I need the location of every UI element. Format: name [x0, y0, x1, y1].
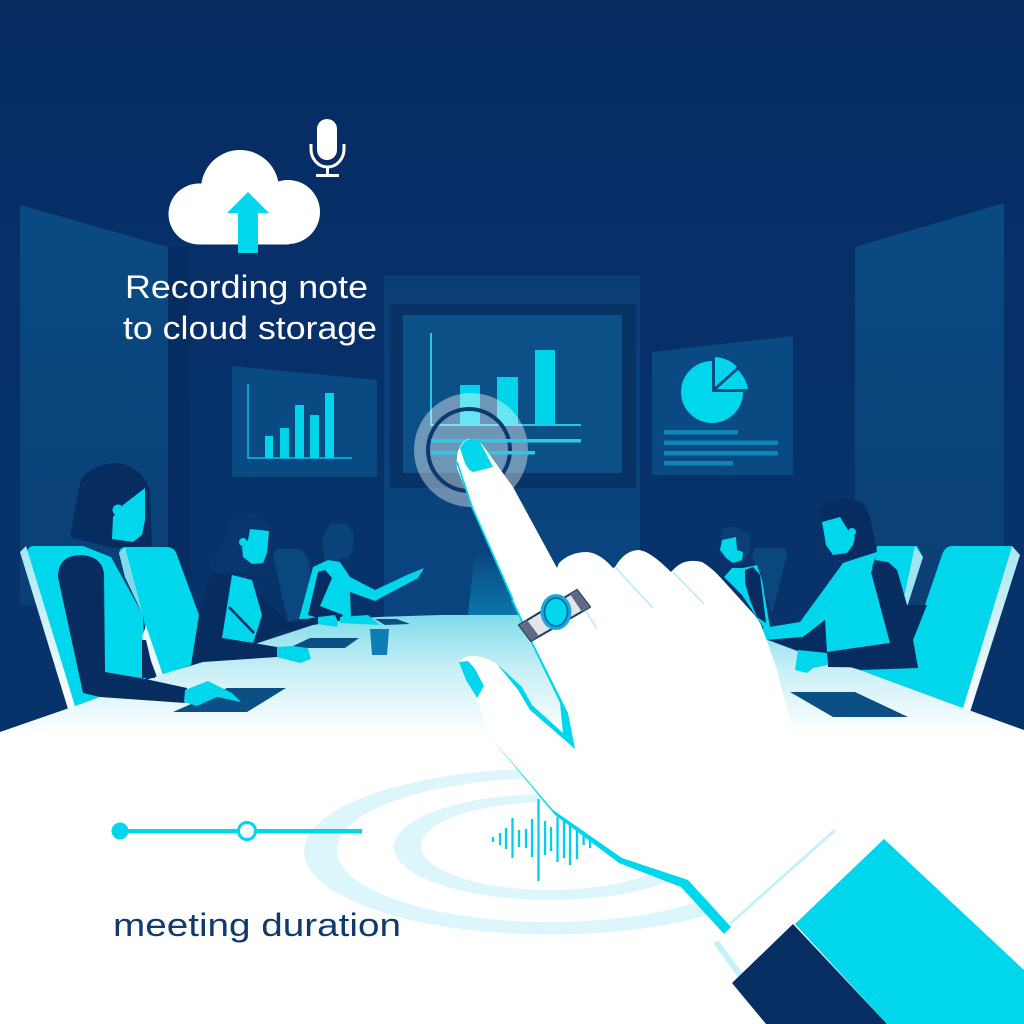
ring: [519, 590, 590, 641]
sound ripple ellipses: [304, 768, 796, 935]
chair: left front: [27, 546, 186, 706]
person: front left woman and chairs: [20, 463, 199, 709]
cuff lines: [716, 830, 835, 976]
heading: recording note: [123, 269, 377, 346]
pointing man hands: [318, 615, 380, 627]
heading: recording note: Recording note: [125, 269, 368, 305]
chair: second: [119, 547, 199, 675]
torso: [763, 552, 890, 652]
icon: upload arrow: [227, 192, 269, 253]
front chair stripe: [963, 546, 1020, 712]
face: [822, 517, 855, 555]
sleeve: cyan: [795, 839, 1024, 1024]
nail: thumb: [459, 661, 484, 698]
second chair stripe: [119, 547, 143, 615]
arms and hands on the table: [58, 555, 927, 717]
panel: back wall: [384, 275, 640, 620]
chair: right back: [875, 546, 923, 607]
panel: right wall: [855, 203, 1004, 606]
person: far right: [720, 526, 770, 630]
back chair stripe: [904, 546, 923, 607]
finger creases: [585, 567, 704, 629]
second woman arm on table: [203, 638, 277, 662]
hair: [820, 498, 877, 560]
paper: front left: [173, 688, 286, 712]
sound waveform: [493, 799, 590, 881]
cup: [370, 629, 389, 655]
hair: [70, 463, 152, 548]
table: [0, 615, 1024, 1024]
chair stripe: [20, 546, 75, 709]
wrist outline: [492, 739, 731, 934]
timeline slider: [112, 822, 362, 840]
left screen with bar chart: [232, 366, 377, 477]
sleeve: [732, 839, 1024, 1024]
right woman arm: [827, 562, 927, 668]
ear: [112, 504, 124, 516]
nail: index: [460, 439, 493, 472]
icon: cloud upload: [168, 150, 320, 253]
panel: left wall: [20, 205, 168, 606]
face: [112, 488, 145, 542]
label: meeting duration: meeting duration: [113, 907, 401, 943]
pie chart: [681, 357, 748, 423]
finger outline: [497, 600, 575, 749]
paper: right: [790, 692, 908, 717]
far chairs: [273, 548, 787, 622]
paper: far: [375, 619, 410, 625]
second woman hand: [277, 645, 311, 663]
main presentation screen: [390, 304, 636, 488]
left woman arm: [58, 555, 187, 703]
icon: microphone: [311, 119, 344, 176]
touch ripple rings: [414, 393, 581, 507]
right woman hand: [795, 650, 828, 673]
person: pointing man: [299, 523, 424, 622]
hand pointing with ring: [457, 439, 850, 934]
hand shape: [457, 439, 850, 925]
bar chart: main screen: [431, 333, 581, 425]
right screen with pie chart: [652, 336, 793, 475]
hand: front left: [184, 681, 241, 706]
sleeve: navy: [732, 924, 887, 1024]
person: second woman: [188, 513, 318, 668]
paper: center left: [293, 638, 359, 648]
chair: right front: [860, 546, 1012, 708]
heading: recording note: to cloud storage: [123, 310, 377, 346]
person: right woman and chairs: [763, 498, 1020, 712]
ear: [848, 528, 856, 536]
